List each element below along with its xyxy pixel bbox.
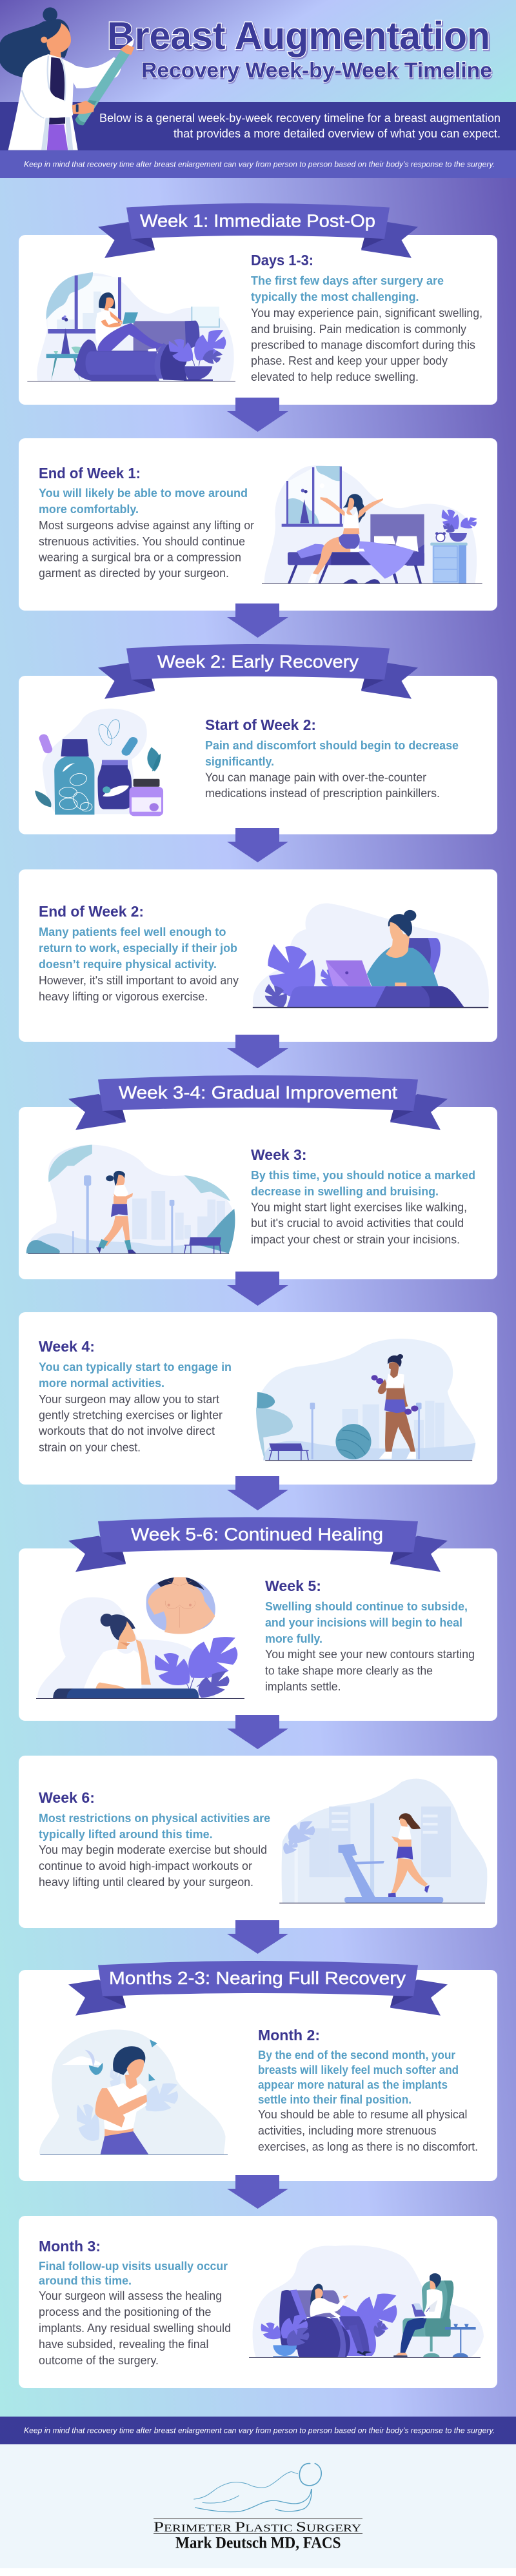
panel: End of Week 1 [19,438,497,611]
heading: Week 5: [265,1577,321,1594]
logo doctor name: Mark Deutsch MD, FACS [175,2535,341,2552]
heading: Week 6: [39,1789,95,1806]
body text: workouts that do not involve direct [38,1425,215,1437]
heading: Week 3: [251,1146,307,1163]
body text: strenuous activities. You should continue [39,535,245,548]
highlight text: Pain and discomfort should begin to decrease [205,739,459,752]
highlight text [39,1361,232,1390]
body text: continue to avoid high-impact workouts or [39,1860,252,1872]
illustration: woman imagining results [36,1577,244,1699]
panel: Week 5 [19,1548,497,1721]
highlight text [251,1169,475,1198]
body text: elevated to help reduce swelling. [251,370,419,383]
highlight text: By the end of the second month, your [258,2049,455,2062]
highlight text: You can typically start to engage in [39,1361,232,1374]
ribbon: Week 3-4: Week 3-4: Gradual Improvement [119,1082,397,1102]
panel: Week 3 [19,1107,497,1279]
highlight text [39,487,248,516]
ribbon: Week 5-6 [68,1517,448,1572]
body text [251,307,482,383]
arrow 8 [227,1920,288,1954]
illustration: woman jogging in park [26,1144,235,1254]
panel: Week 4 [19,1312,497,1485]
highlight text: settle into their final position. [258,2093,412,2106]
illustration: patient consulting surgeon [249,2246,484,2358]
body text: impact your chest or strain your incisions. [251,1233,460,1246]
body text: You can manage pain with over-the-counter [205,771,426,784]
illustration: woman stretching on bed [262,465,482,584]
panel: Start of Week 2 [19,676,497,834]
highlight text: more comfortably. [39,503,139,516]
body text [265,1648,475,1693]
arrow 3 [227,828,288,862]
body text: strain on your chest. [39,1441,141,1454]
heading: Week 4: [39,1338,95,1355]
highlight text [205,739,459,768]
highlight text: breasts will likely feel much softer and [258,2064,459,2076]
highlight text: more fully. [265,1632,322,1645]
arrow 6 [227,1476,288,1510]
body text [38,519,254,580]
highlight text [251,274,444,303]
panel: Days 1-3 [19,235,497,405]
illustration: doctor with pencil [0,7,134,150]
panel: End of Week 2 [19,869,497,1042]
intro text: Below is a general week-by-week recovery timeline for a breast augmentation [99,112,501,125]
panel: Month 3 [19,2216,497,2388]
body text: Most surgeons advise against any lifting or [39,519,254,532]
highlight text: return to work, especially if their job [39,942,237,955]
heading: Month 3: [39,2238,101,2255]
highlight text: decrease in swelling and bruising. [251,1185,439,1198]
arrow 4 [227,1035,288,1068]
body text: prescribed to manage discomfort during this [251,338,475,351]
body text: process and the positioning of the [39,2306,212,2318]
highlight text: appear more natural as the implants [258,2078,448,2091]
panel: Month 2 [19,1970,497,2181]
logo rules [154,2518,362,2534]
arrow 5 [227,1272,288,1306]
heading: End of Week 1: [39,465,141,482]
ribbon: Week 5-6: Week 5-6: Continued Healing [131,1525,383,1544]
logo name: PERIMETER PLASTIC SURGERY [154,2519,362,2535]
highlight text: Swelling should continue to subside, [265,1600,468,1613]
highlight text [258,2049,459,2106]
intro text [99,112,501,140]
illustration: woman hugging herself [39,2029,228,2155]
highlight text: significantly. [205,755,274,768]
note band [0,150,516,178]
note text: Keep in mind that recovery time after breast enlargement can vary from person to person based on their body’s response to the surgery. [24,160,495,169]
highlight text: Many patients feel well enough to [39,926,226,938]
body text [205,771,440,800]
ribbon: Week 2 [98,644,418,699]
highlight text [39,926,237,971]
body text: You might see your new contours starting [265,1648,475,1661]
title: Breast Augmentation [107,14,490,57]
body text: wearing a surgical bra or a compression [38,551,241,564]
body text [39,1843,267,1889]
body text: gently stretching exercises or lighter [39,1408,223,1421]
arrow 9 [227,2175,288,2209]
heading: End of Week 2: [39,903,144,920]
heading: Month 2: [258,2027,320,2044]
highlight text: Final follow-up visits usually occur [39,2260,228,2273]
body text: but it's crucial to avoid activities that could [251,1217,464,1230]
body text: to take shape more clearly as the [265,1664,433,1677]
highlight text: around this time. [39,2275,132,2287]
highlight text: Most restrictions on physical activities are [39,1812,270,1825]
highlight text: more normal activities. [39,1377,164,1390]
arrow 7 [227,1715,288,1749]
highlight text: typically lifted around this time. [39,1828,213,1841]
ribbon: Week 2: Week 2: Early Recovery [157,652,359,671]
illustration: woman resting on sofa [27,272,235,381]
body text: You may experience pain, significant swelling, [251,307,482,319]
body text [39,974,239,1003]
body text: and bruising. Pain medication is commonly [251,323,466,336]
header panel [0,0,516,178]
illustration: medicine bottles [35,709,163,816]
panel: Week 6 [19,1756,497,1928]
arrow 2 [227,603,288,638]
ribbon: Week 1: Week 1: Immediate Post-Op [140,210,375,231]
body text: You might start light exercises like walking, [251,1201,467,1213]
heading: Start of Week 2: [205,716,316,733]
body text: garment as directed by your surgeon. [39,567,229,580]
ribbon: Months 2-3: Months 2-3: Nearing Full Recovery [109,1968,406,1988]
body text: However, it's still important to avoid any [39,974,239,987]
body text: exercises, as long as there is no discomfort. [258,2140,478,2153]
ribbon: Week 1 [98,203,418,258]
body text: medications instead of prescription painkillers. [205,787,440,800]
highlight text: typically the most challenging. [251,290,419,303]
intro text: that provides a more detailed overview of what you can expect. [174,127,501,140]
body text: You should be able to resume all physical [258,2108,467,2121]
body text: heavy lifting until cleared by your surgeon. [39,1876,253,1889]
highlight text: doesn’t require physical activity. [39,958,217,971]
highlight text: You will likely be able to move around [39,487,248,500]
body text: You may begin moderate exercise but should [39,1843,267,1856]
body text: heavy lifting or vigorous exercise. [39,990,208,1003]
body text: phase. Rest and keep your upper body [251,354,448,367]
body text: activities, including more strenuous [258,2124,436,2137]
heading: Days 1-3: [251,252,313,269]
body text: implants settle. [265,1680,341,1693]
arrow 1 [227,398,288,432]
footer note band [0,2417,516,2444]
highlight text [39,2260,228,2287]
body text [251,1201,467,1246]
subtitle: Recovery Week-by-Week Timeline [141,58,492,82]
highlight text: and your incisions will begin to heal [265,1616,462,1629]
illustration: woman at laptop [253,903,489,1009]
illustration: woman on treadmill [279,1779,487,1903]
body text [258,2108,478,2153]
footer logo panel [0,2444,516,2568]
illustration: woman with dumbbells [256,1339,475,1461]
body text: implants. Any residual swelling should [39,2322,231,2335]
body text [38,1393,223,1454]
body text: have subsided, revealing the final [39,2338,209,2351]
body text: Your surgeon will assess the healing [39,2289,222,2302]
ribbon: Week 3-4 [68,1075,448,1130]
body text: outcome of the surgery. [39,2354,159,2367]
logo: body outline swoosh [194,2464,321,2512]
highlight text [39,1812,270,1841]
highlight text: The first few days after surgery are [251,274,444,287]
body text: Your surgeon may allow you to start [39,1393,219,1406]
footer note band: Keep in mind that recovery time after breast enlargement can vary from person to person based on their body’s response to the surgery. [24,2426,495,2435]
ribbon: Months 2-3 [68,1961,448,2016]
highlight text: By this time, you should notice a marked [251,1169,475,1182]
body text [39,2289,231,2367]
intro band [0,102,516,150]
highlight text [265,1600,468,1645]
